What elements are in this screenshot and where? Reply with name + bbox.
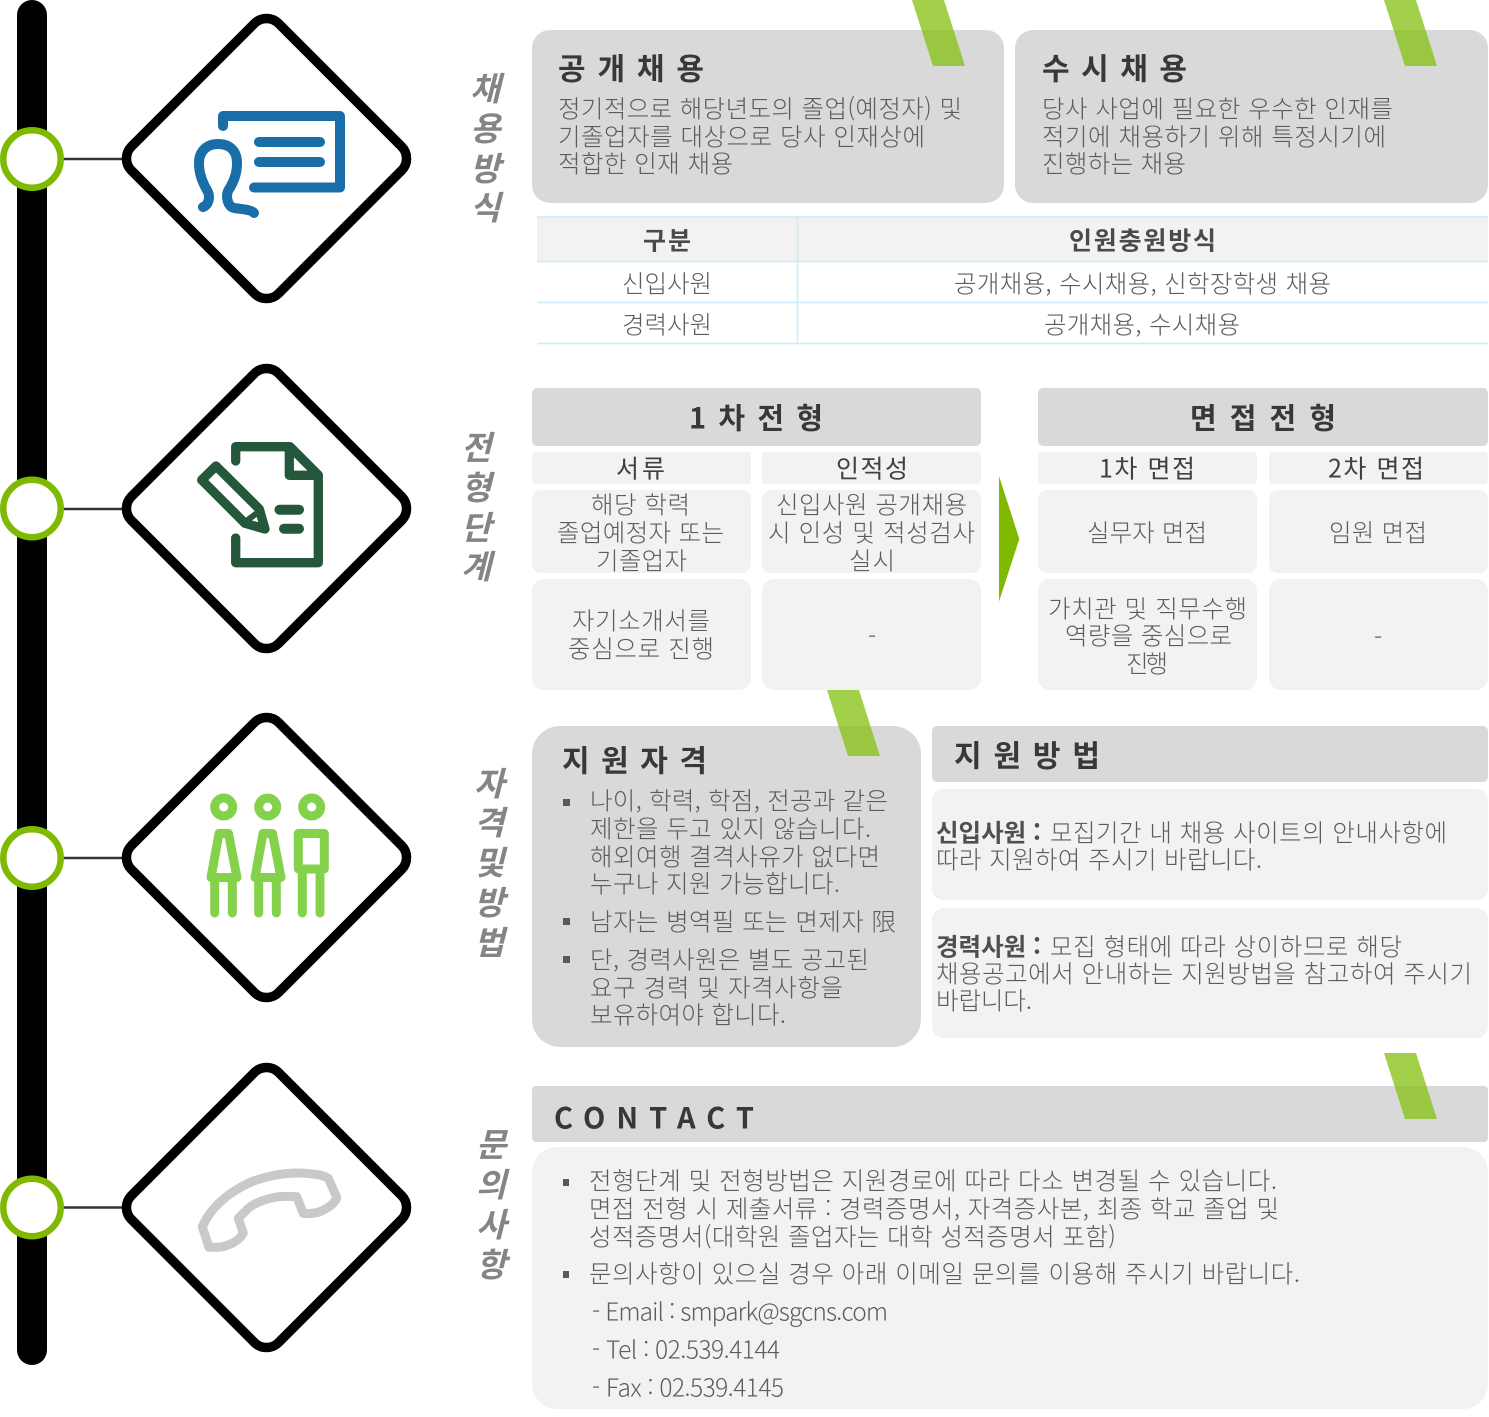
panel: 1차 전형 <box>532 388 981 690</box>
vertical label: 채용방식: 방 <box>470 143 505 191</box>
panel: contact body: - Email : smpark@sgcns.com <box>592 1294 888 1329</box>
panel: 1차 전형: 신입사원 공개채용 <box>776 487 967 522</box>
bullet list: 지원자격: 보유하여야 합니다. <box>590 997 786 1032</box>
bullet list: 지원자격: 단, 경력사원은 별도 공고된 <box>590 942 869 977</box>
panel: 면접 전형: 실무자 면접 <box>1087 515 1207 550</box>
panel: contact body: 면접 전형 시 제출서류 : 경력증명서, 자격증사본, 최종 학교 졸업 및 <box>589 1191 1279 1226</box>
vertical label: 전형단계: 단 <box>461 502 496 550</box>
panel: 지원방법: 경력사원 : <box>936 929 1041 964</box>
panel: 지원방법: 바랍니다. <box>936 983 1032 1018</box>
panel: 지원방법: 따라 지원하여 주시기 바랍니다. <box>936 842 1262 877</box>
vertical label: 전형단계: 계 <box>461 541 496 589</box>
vertical label: 문의사항: 사 <box>476 1199 510 1247</box>
vertical label: 자격및방법: 자 <box>474 758 508 806</box>
panel: 1차 전형: 자기소개서를 <box>572 603 710 638</box>
ribbon accent <box>827 690 880 756</box>
panel: contact body: 성적증명서(대학원 졸업자는 대학 성적증명서 포함) <box>589 1219 1116 1254</box>
panel: contact header: CONTACT <box>554 1096 754 1138</box>
panel: 면접 전형 <box>1038 388 1488 690</box>
panel: 공개채용 <box>532 30 1004 203</box>
vertical label: 문의사항: 항 <box>476 1239 511 1287</box>
icon: three people <box>211 798 324 913</box>
text block: 공개채용 설명: 적합한 인재 채용 <box>558 146 733 181</box>
text block: 공개채용 설명: 기졸업자를 대상으로 당사 인재상에 <box>558 119 925 154</box>
table: 인원충원방식 <box>537 217 1488 344</box>
panel: 1차 전형: 해당 학력 <box>591 487 690 522</box>
panel: 면접 전형: 진행 <box>1126 646 1168 681</box>
text block: 수시채용 설명 <box>1042 91 1393 181</box>
vertical label: 전형단계 <box>461 422 496 589</box>
table: 인원충원방식: 공개채용, 수시채용, 신학장학생 채용 <box>954 266 1331 301</box>
panel: 면접 전형: - <box>1374 620 1382 655</box>
panel: 지원방법: 지 원 방 법 <box>954 732 1100 776</box>
panel: 1차 전형: 시 인성 및 적성검사 <box>768 515 975 550</box>
table: 인원충원방식: 구분 <box>643 222 691 258</box>
vertical label: 채용방식 <box>470 63 505 230</box>
text block: 수시채용 설명: 진행하는 채용 <box>1042 146 1186 181</box>
bullet list: 지원자격: 요구 경력 및 자격사항을 <box>590 970 843 1005</box>
vertical label: 채용방식: 식 <box>470 182 504 230</box>
text block: 공개채용 설명: 정기적으로 해당년도의 졸업(예정자) 및 <box>558 91 962 126</box>
vertical label: 문의사항: 문 <box>476 1119 509 1167</box>
panel: 면접 전형: 면 접 전 형 <box>1190 396 1336 438</box>
panel: 1차 전형: 인적성 <box>836 450 908 486</box>
vertical label: 문의사항 <box>476 1119 511 1287</box>
bullet list: 지원자격: 나이, 학력, 학점, 전공과 같은 <box>590 783 888 818</box>
table: 인원충원방식: 공개채용, 수시채용 <box>1044 307 1240 342</box>
heading: 수시채용: 수 시 채 용 <box>1042 45 1187 89</box>
vertical label: 자격및방법: 및 <box>474 837 508 885</box>
panel: 1차 전형: 졸업예정자 또는 <box>557 515 724 550</box>
icon: telephone handset <box>202 1173 337 1247</box>
heading: 지원자격: 지 원 자 격 <box>562 737 707 781</box>
icon: document with pencil <box>202 447 318 563</box>
text block: 공개채용 설명 <box>558 91 962 181</box>
vertical label: 전형단계: 형 <box>461 462 495 510</box>
panel: 면접 전형: 역량을 중심으로 <box>1065 618 1232 653</box>
panel: 면접 전형: 가치관 및 직무수행 <box>1048 591 1247 626</box>
panel: 지원방법: 모집 형태에 따라 상이하므로 해당 <box>1050 929 1402 964</box>
bullet list: 지원자격: 제한을 두고 있지 않습니다. <box>590 811 871 846</box>
panel: 면접 전형: 임원 면접 <box>1329 515 1427 550</box>
panel: 1차 전형: 실시 <box>849 543 895 578</box>
text block: 수시채용 설명: 당사 사업에 필요한 우수한 인재를 <box>1042 91 1393 126</box>
panel: contact body: 문의사항이 있으실 경우 아래 이메일 문의를 이용해 주시기 바랍니다. <box>589 1256 1300 1291</box>
bullet list: 지원자격 <box>563 783 896 1032</box>
panel: contact header <box>532 1086 1488 1142</box>
icon: person with card <box>199 116 340 213</box>
vertical label: 전형단계: 전 <box>461 422 495 470</box>
table: 인원충원방식: 경력사원 <box>622 307 712 342</box>
panel: 1차 전형: 1 차 전 형 <box>689 396 823 438</box>
timeline: vertical bar with nodes <box>3 0 124 1365</box>
panel: contact body: 전형단계 및 전형방법은 지원경로에 따라 다소 변경될 수 있습니다. <box>589 1163 1277 1198</box>
panel: 1차 전형: 기졸업자 <box>596 543 687 578</box>
panel: 1차 전형: 서류 <box>616 450 665 486</box>
panel: 지원방법: 모집기간 내 채용 사이트의 안내사항에 <box>1050 815 1447 850</box>
panel: 수시채용 <box>1015 30 1488 203</box>
panel: 지원자격 <box>532 690 921 1047</box>
panel: 지원방법: 신입사원 : <box>936 815 1041 850</box>
ribbon accents <box>912 0 1437 66</box>
panel: contact body <box>532 1147 1488 1409</box>
bullet list: 지원자격: 남자는 병역필 또는 면제자 限 <box>590 904 896 939</box>
panel: 1차 전형: - <box>868 619 876 654</box>
vertical label: 자격및방법: 격 <box>474 797 508 845</box>
text block: 수시채용 설명: 적기에 채용하기 위해 특정시기에 <box>1042 119 1386 154</box>
vertical label: 자격및방법 <box>474 758 509 965</box>
diamond frames <box>119 11 414 1355</box>
vertical label: 자격및방법: 방 <box>474 877 509 925</box>
vertical label: 채용방식: 용 <box>470 103 503 151</box>
vertical label: 자격및방법: 법 <box>474 917 508 965</box>
vertical label: 문의사항: 의 <box>476 1159 510 1207</box>
panel: 면접 전형: 2차 면접 <box>1328 450 1424 486</box>
table: 인원충원방식: 인원충원방식 <box>1069 222 1216 258</box>
bullet list: 지원자격: 해외여행 결격사유가 없다면 <box>590 839 880 874</box>
heading: 공개채용: 공 개 채 용 <box>558 45 704 89</box>
vertical label: 채용방식: 채 <box>470 63 505 111</box>
panel: 1차 전형: 중심으로 진행 <box>568 631 714 666</box>
bullet list: 지원자격: 누구나 지원 가능합니다. <box>590 866 840 901</box>
table: 인원충원방식: 신입사원 <box>622 266 712 301</box>
arrow <box>999 476 1019 602</box>
panel: contact body: - Fax : 02.539.4145 <box>592 1370 784 1405</box>
panel: 면접 전형: 1차 면접 <box>1099 450 1195 486</box>
panel: 지원방법 <box>932 726 1488 1038</box>
ribbon accent <box>1384 1053 1437 1119</box>
panel: 지원방법: 채용공고에서 안내하는 지원방법을 참고하여 주시기 <box>936 956 1472 991</box>
panel: contact body: - Tel : 02.539.4144 <box>592 1332 780 1367</box>
